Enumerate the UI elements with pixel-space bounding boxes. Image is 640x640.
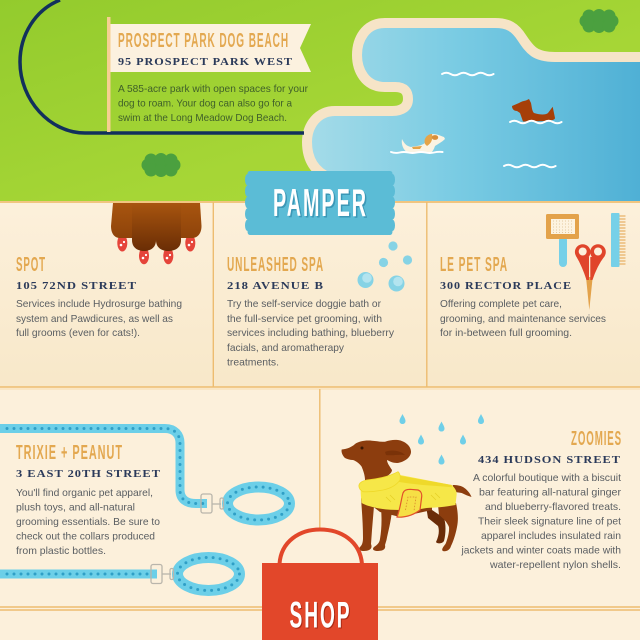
- address: 218 AVENUE B: [227, 281, 324, 292]
- description: dog to roam. Your dog can also go for a: [118, 98, 292, 110]
- description: swim at the Long Meadow Dog Beach.: [118, 113, 287, 124]
- icon: bubbles: [358, 241, 412, 292]
- description: A 585-acre park with open spaces for your: [118, 84, 309, 95]
- panel: Spot: SPOT: [16, 254, 46, 276]
- icon: lower leash and collar: [0, 558, 240, 590]
- description: [461, 473, 622, 571]
- description: grooming, and maintenance services: [440, 314, 606, 325]
- description: Their sleek signature line of pet: [478, 516, 621, 528]
- description: [227, 299, 395, 368]
- description: jackets and winter coats made with: [461, 546, 621, 556]
- icon: white swimming dog: [391, 134, 445, 153]
- panel: Spot: [16, 203, 202, 339]
- icon: brown swimming dog: [510, 99, 562, 123]
- description: system and Pawdicures, as well as: [16, 314, 173, 325]
- banner: pamper: PAMPER: [273, 182, 368, 225]
- description: check out the collars produced: [16, 532, 155, 542]
- bush left: [142, 153, 180, 177]
- banner: pamper: [245, 171, 395, 235]
- panel: park: [0, 0, 640, 220]
- far back leg: [426, 506, 446, 543]
- banner: shop bag: [262, 530, 378, 640]
- icon: comb: [611, 213, 626, 267]
- coat collar: [359, 472, 400, 492]
- icon: dog in yellow raincoat: [342, 440, 472, 551]
- address: 434 HUDSON STREET: [478, 455, 621, 466]
- description: grooming essentials. Be sure to: [16, 517, 160, 528]
- address: 300 RECTOR PLACE: [440, 281, 572, 292]
- description: treatments.: [227, 358, 279, 368]
- panel: Zoomies: [342, 414, 622, 571]
- heading: Trixie + Peanut: TRIXIE + PEANUT: [16, 442, 123, 464]
- description: [16, 299, 182, 339]
- heading: Prospect Park Dog Beach: PROSPECT PARK DOG BEACH: [118, 30, 289, 52]
- front and hind legs with belly: [359, 485, 472, 551]
- description: [440, 299, 606, 339]
- banner: shop bag: SHOP: [290, 594, 352, 636]
- description: Offering complete pet care,: [440, 299, 562, 310]
- banner: pamper: PAMPER: [274, 184, 370, 226]
- flag pole: [107, 17, 110, 132]
- panel: Le Pet Spa: [440, 213, 626, 339]
- flag banner: [110, 24, 311, 72]
- description: and blueberry-flavored treats.: [485, 502, 621, 513]
- description: full grooms (even for cats!).: [16, 328, 140, 339]
- description: from plastic bottles.: [16, 546, 106, 557]
- heading: Unleashed Spa: UNLEASHED SPA: [227, 254, 324, 276]
- icon: upper leash and collar: [0, 428, 290, 520]
- description: You'll find organic pet apparel,: [16, 488, 153, 499]
- address: 3 EAST 20TH STREET: [16, 469, 161, 480]
- description: facials, and aromatherapy: [227, 343, 345, 354]
- description: water-repellent nylon shells.: [489, 560, 621, 571]
- description: [16, 488, 160, 557]
- icon: dog paws with painted nails: [111, 203, 202, 264]
- description: the full-service pet grooming, with: [227, 314, 382, 325]
- icon: slicker brush: [546, 214, 579, 267]
- pool: [307, 23, 640, 220]
- bush right: [580, 9, 618, 33]
- icon: scissors: [575, 244, 606, 310]
- description: plush toys, and all-natural: [16, 502, 135, 514]
- description: Try the self-service doggie bath or: [227, 299, 382, 310]
- description: services including bathing, blueberry: [227, 328, 395, 339]
- panel: Unleashed Spa: [227, 241, 412, 368]
- address: 105 72ND STREET: [16, 281, 137, 292]
- heading: Le Pet Spa: LE PET SPA: [440, 254, 508, 276]
- address: 95 PROSPECT PARK WEST: [118, 57, 293, 68]
- water ripples: [442, 73, 556, 167]
- head and ear: [342, 440, 411, 480]
- coat flap: [397, 489, 422, 517]
- path line: [20, 0, 304, 133]
- description: [118, 84, 309, 124]
- description: Services include Hydrosurge bathing: [16, 299, 182, 310]
- raincoat: [361, 475, 457, 510]
- banner: shop bag: SHOP: [290, 596, 352, 636]
- panel: Trixie + Peanut: [0, 428, 290, 590]
- description: apparel includes insulated rain: [481, 531, 621, 542]
- section divider lines: [0, 201, 640, 610]
- icon: rain drops: [400, 414, 484, 464]
- description: for in-between full grooming.: [440, 328, 572, 339]
- description: A colorful boutique with a biscuit: [473, 473, 621, 484]
- description: bar featuring all-natural ginger: [479, 488, 622, 498]
